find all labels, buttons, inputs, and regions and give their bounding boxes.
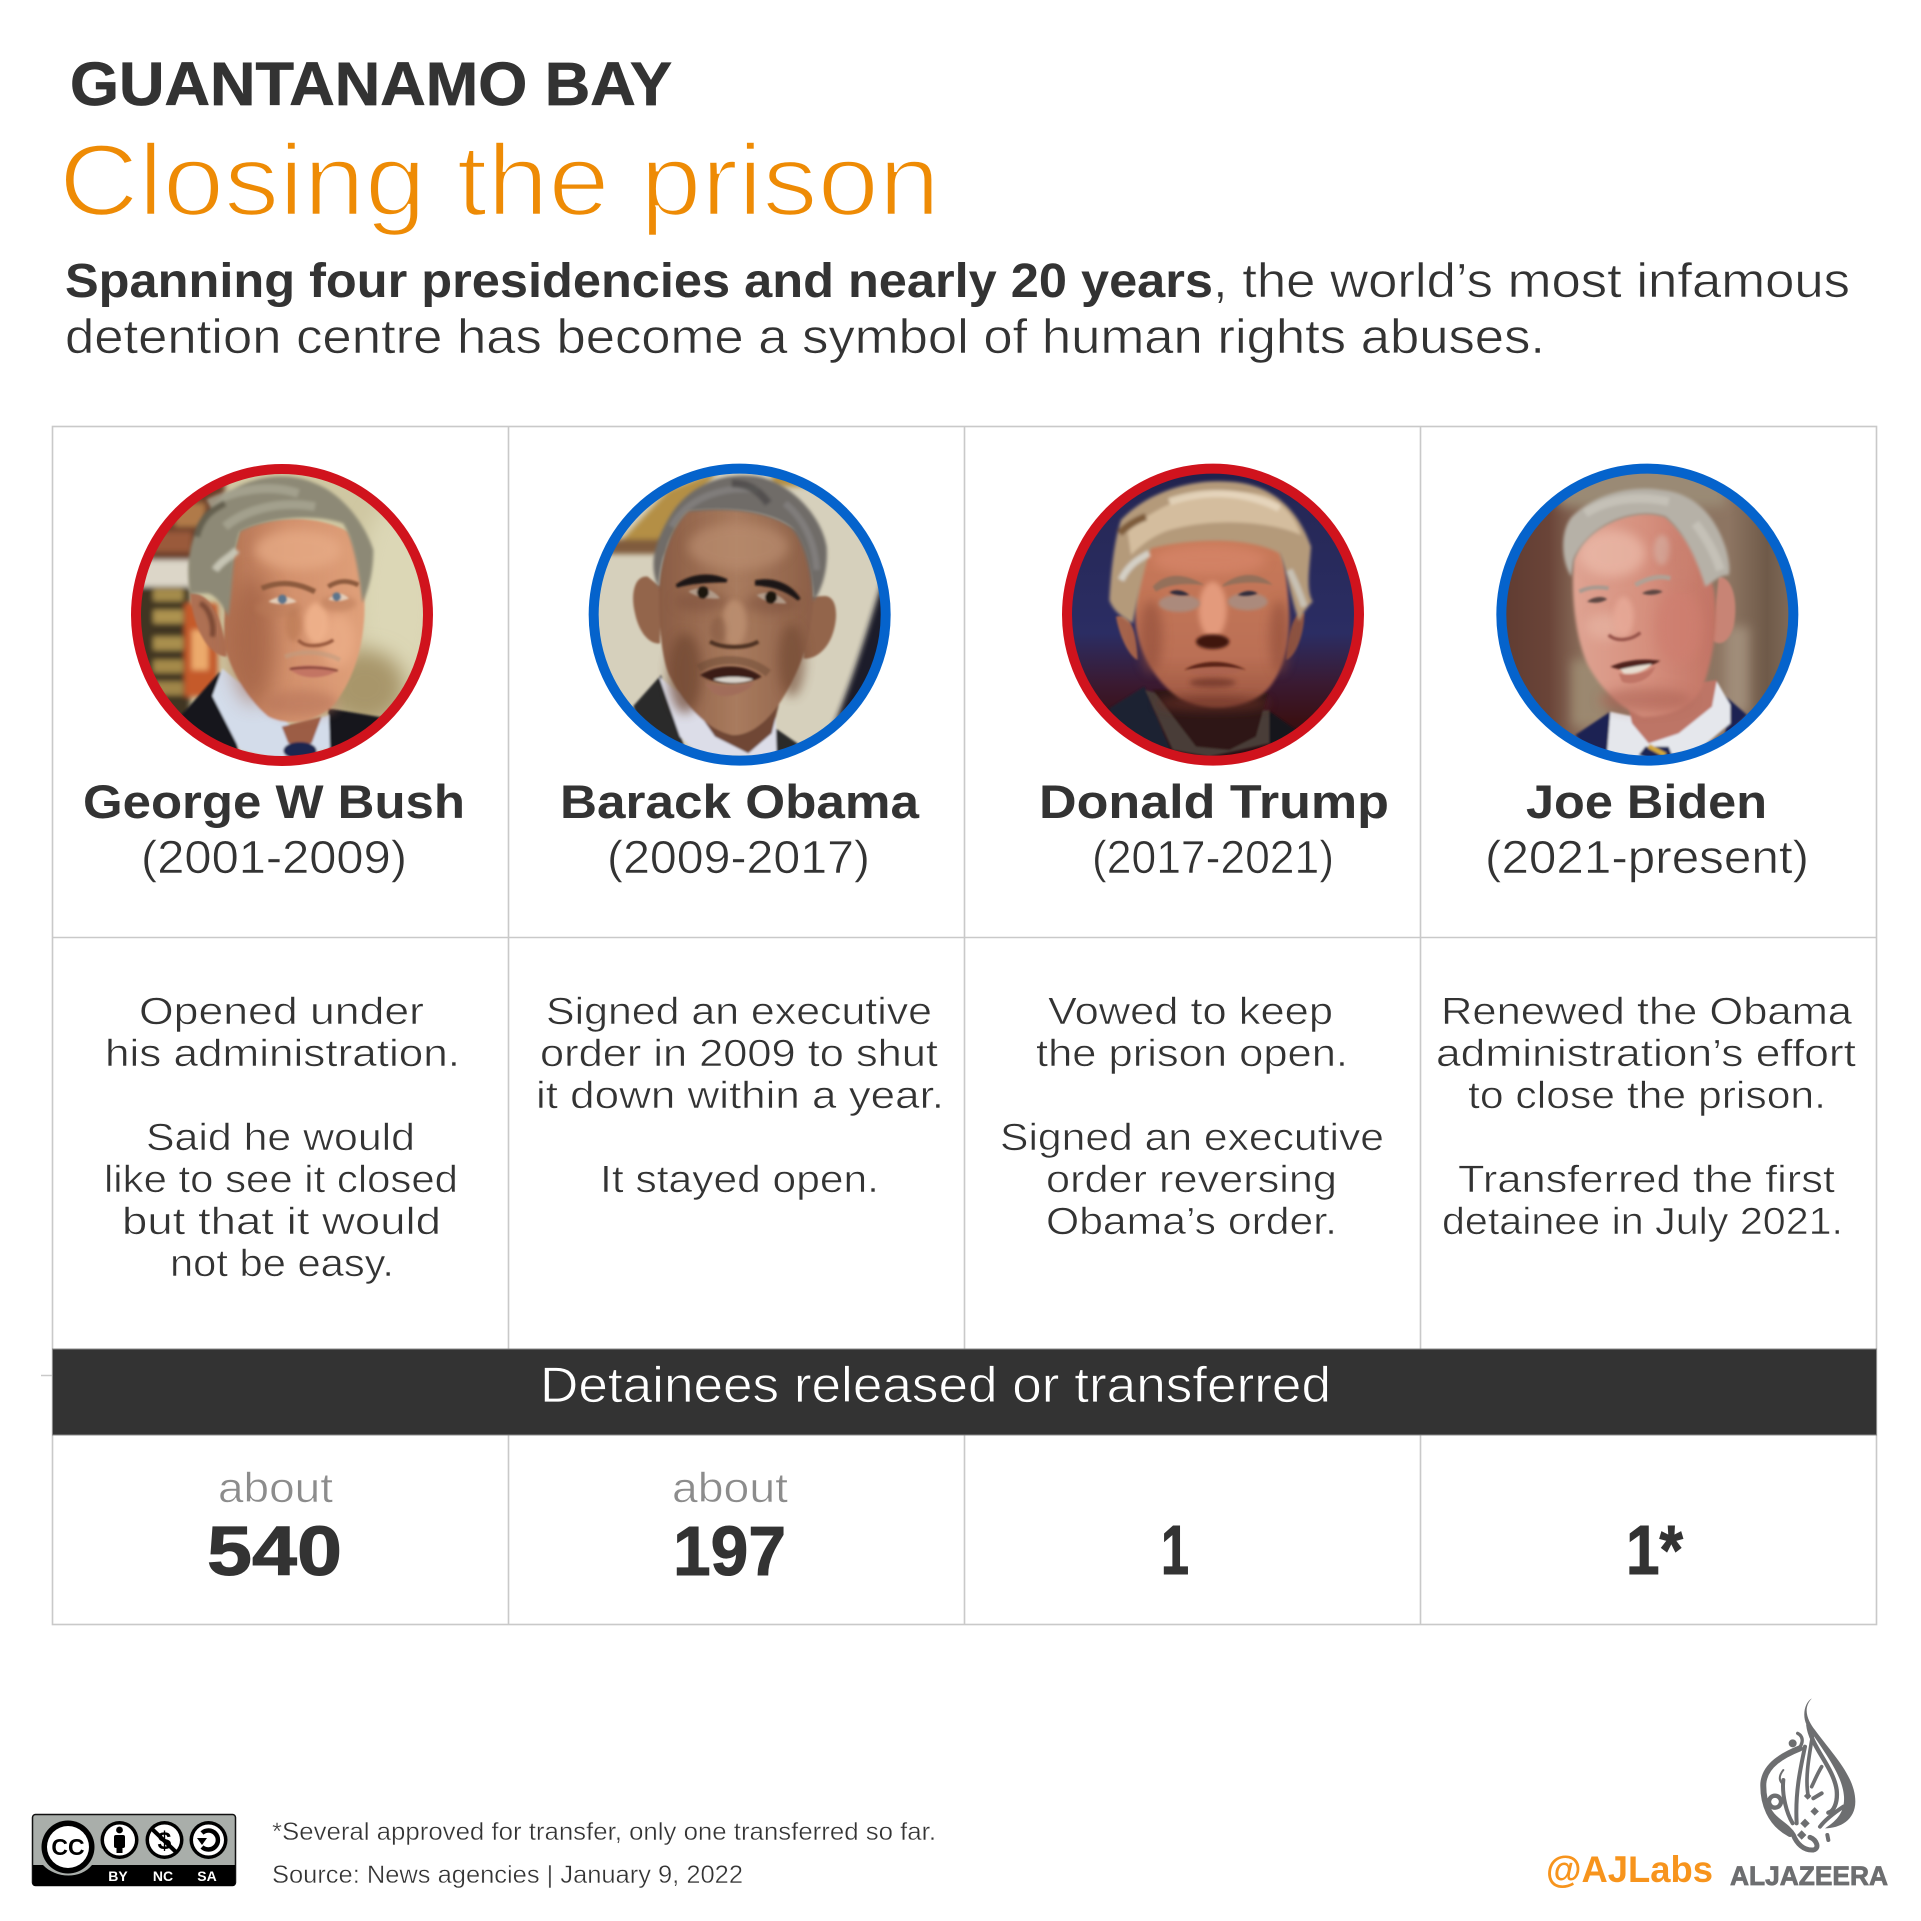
description: Bush: [104, 991, 460, 1285]
section bar: detainees released or transferred: Detainees released or transferred: [540, 1357, 1331, 1413]
description: Biden: [1436, 991, 1857, 1243]
stat: Trump 1: 1: [1161, 1511, 1189, 1589]
name: Donald Trump: Donald Trump: [1039, 775, 1389, 828]
description: Trump: Signed an executive: [1000, 1117, 1384, 1159]
table grid: [41, 426, 1877, 1625]
description: Bush: Said he would: [146, 1117, 415, 1159]
description: Trump: [1000, 991, 1384, 1243]
description: Bush: not be easy.: [170, 1243, 394, 1285]
description: Biden: Renewed the Obama: [1441, 991, 1853, 1033]
name: Barack Obama: Barack Obama: [560, 775, 920, 828]
term: Biden: (2021-present): [1485, 831, 1809, 883]
portrait: Barack Obama: [585, 460, 901, 770]
handle: @AJLabs: @AJLabs: [1546, 1849, 1713, 1890]
description: Biden: Transferred the first: [1458, 1159, 1835, 1201]
intro text: , the world’s most infamous: [1213, 255, 1850, 308]
stat: Biden 1*: 1*: [1626, 1511, 1684, 1589]
term: Bush: (2001-2009): [141, 831, 407, 883]
description: Obama: order in 2009 to shut: [540, 1033, 938, 1075]
portrait: George W Bush: [125, 460, 441, 770]
ring: [1067, 469, 1359, 761]
description: Biden: detainee in July 2021.: [1442, 1201, 1843, 1243]
source line: Source: News agencies | January 9, 2022: [272, 1861, 743, 1889]
title: Guantanamo Bay: GUANTANAMO BAY: [70, 50, 672, 118]
description: Bush: like to see it closed: [104, 1159, 458, 1201]
header: [59, 50, 1850, 364]
icon: Creative Commons badge: [32, 1814, 236, 1886]
description: Obama: Signed an executive: [546, 991, 932, 1033]
description: Obama: It stayed open.: [600, 1159, 879, 1201]
subtitle: Closing the prison: Closing the prison: [59, 125, 940, 237]
icon: Al Jazeera calligraphic logo: [1763, 1698, 1855, 1850]
term: Obama: (2009-2017): [607, 831, 870, 883]
stat: Bush 540: about: [218, 1464, 333, 1511]
description: Biden: administration’s effort: [1436, 1033, 1857, 1075]
section bar: detainees released or transferred: [52, 1349, 1876, 1435]
intro text: Spanning four presidencies and nearly 20 years: [65, 255, 1213, 308]
description: Bush: but that it would: [122, 1201, 441, 1243]
intro text: [65, 255, 1850, 364]
wordmark: Al Jazeera: ALJAZEERA: [1730, 1861, 1888, 1891]
intro text: detention centre has become a symbol of human rights abuses.: [65, 311, 1545, 364]
stat: Obama 197: 197: [673, 1512, 786, 1590]
icon: Creative Commons badge: $: [158, 1827, 172, 1855]
term: Trump: (2017-2021): [1092, 831, 1334, 883]
description: Biden: to close the prison.: [1468, 1075, 1826, 1117]
stat: Obama 197: about: [672, 1464, 788, 1511]
description: Trump: order reversing: [1046, 1159, 1337, 1201]
ring: [594, 469, 886, 761]
stat: Bush 540: 540: [207, 1512, 342, 1590]
description: Trump: Obama’s order.: [1046, 1201, 1337, 1243]
portrait: Donald Trump: [1056, 460, 1372, 770]
stat: Obama 197: [672, 1464, 788, 1590]
icon: Creative Commons badge: CC: [51, 1834, 85, 1860]
stat: Bush 540: [207, 1464, 342, 1590]
name: George W Bush: George W Bush: [83, 775, 465, 828]
description: Obama: [536, 991, 944, 1201]
icon: Creative Commons badge: NC: [153, 1868, 173, 1884]
icon: Creative Commons badge: SA: [197, 1868, 217, 1884]
description: Trump: the prison open.: [1036, 1033, 1348, 1075]
icon: Creative Commons badge: BY: [108, 1868, 128, 1884]
description: Obama: it down within a year.: [536, 1075, 944, 1117]
ring: [136, 469, 428, 761]
name: Joe Biden: Joe Biden: [1526, 775, 1767, 828]
description: Bush: his administration.: [105, 1033, 460, 1075]
description: Bush: Opened under: [139, 991, 424, 1033]
footnote: *Several approved for transfer, only one transferred so far.: [272, 1818, 936, 1846]
portrait: Joe Biden: [1492, 460, 1808, 770]
description: Trump: Vowed to keep: [1048, 991, 1333, 1033]
president names and terms: [83, 775, 1809, 883]
ring: [1501, 469, 1793, 761]
